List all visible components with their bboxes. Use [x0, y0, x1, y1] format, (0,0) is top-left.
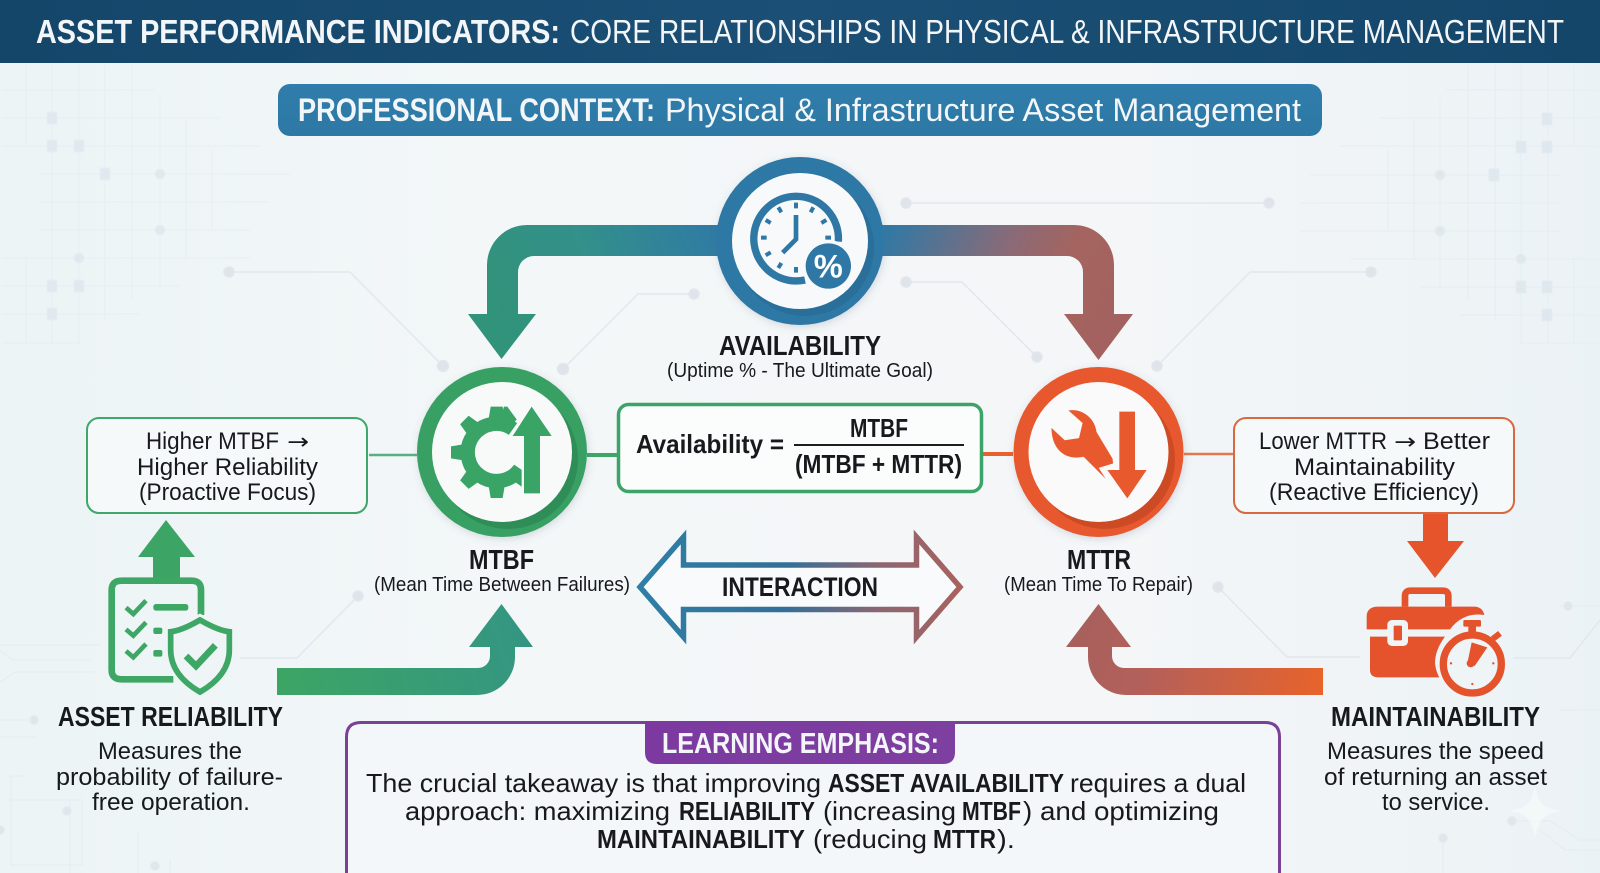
professional context pill: Physical & Infrastructure Asset Management — [665, 92, 1301, 128]
availability label — [667, 330, 933, 382]
interaction double arrow: INTERACTION — [722, 572, 878, 602]
arrow: availability to MTTR — [865, 225, 1133, 360]
decorative grid: top left — [2, 65, 290, 343]
professional context pill — [278, 84, 1322, 136]
learning emphasis tag: LEARNING EMPHASIS: — [662, 728, 939, 760]
asset reliability text: free operation. — [92, 789, 250, 816]
icon: availability clock circle — [716, 157, 884, 325]
learning emphasis body text: requires a dual — [1070, 768, 1246, 798]
availability label: (Uptime % - The Ultimate Goal) — [667, 360, 933, 382]
asset reliability text: ASSET RELIABILITY — [58, 701, 283, 732]
learning emphasis body text: ). — [997, 824, 1015, 854]
learning emphasis body text: approach: maximizing — [405, 796, 670, 826]
formula box — [618, 404, 982, 492]
MTBF label — [374, 544, 630, 596]
arrow: callout down to maintainability — [1407, 514, 1464, 578]
asset reliability text — [56, 701, 283, 816]
arrow: reliability to MTBF — [277, 604, 533, 695]
learning emphasis body text: ) and optimizing — [1023, 796, 1219, 826]
MTTR label: MTTR — [1067, 544, 1131, 575]
learning emphasis body text: RELIABILITY — [679, 796, 815, 826]
decorative grid: top right — [1300, 65, 1598, 343]
arrow: maintainability to MTTR — [1066, 604, 1323, 695]
title banner: ASSET PERFORMANCE INDICATORS: — [36, 13, 560, 50]
icon: availability clock circle: % — [814, 248, 843, 285]
callout: higher MTBF: Higher MTBF — [146, 428, 279, 455]
formula box: MTBF — [850, 413, 908, 443]
learning emphasis body text: MTBF — [962, 796, 1021, 826]
learning emphasis tag — [645, 721, 955, 764]
callout: lower MTTR — [1234, 418, 1514, 513]
callout: higher MTBF — [87, 418, 367, 513]
callout: higher MTBF: (Proactive Focus) — [139, 479, 316, 506]
learning emphasis body text: MAINTAINABILITY — [597, 824, 805, 854]
icon: MTBF gear and up arrow circle — [417, 367, 587, 537]
learning emphasis body text: MTTR — [933, 824, 996, 854]
formula box: Availability = — [636, 429, 784, 459]
callout: lower MTTR: → — [1394, 430, 1416, 455]
icon: reliability checklist and shield — [112, 581, 229, 692]
maintainability text — [1324, 701, 1547, 816]
MTTR label — [1004, 544, 1193, 596]
learning emphasis body text: (reducing — [813, 824, 927, 854]
callout: higher MTBF: Higher Reliability — [137, 454, 318, 481]
professional context pill: PROFESSIONAL CONTEXT: — [298, 92, 655, 128]
maintainability text: to service. — [1382, 789, 1490, 816]
interaction double arrow — [640, 537, 960, 637]
callout: higher MTBF: → — [287, 430, 309, 455]
formula box: (MTBF + MTTR) — [795, 449, 962, 479]
learning emphasis body text: (increasing — [823, 796, 956, 826]
maintainability text: MAINTAINABILITY — [1331, 701, 1540, 732]
asset reliability text: probability of failure- — [56, 764, 283, 791]
maintainability text: of returning an asset — [1324, 764, 1547, 791]
title banner — [0, 0, 1600, 63]
callout: lower MTTR: Lower MTTR — [1259, 428, 1387, 455]
callout: lower MTTR: Maintainability — [1294, 454, 1455, 481]
icon: maintainability briefcase and stopwatch — [1367, 591, 1507, 699]
learning emphasis body text: ASSET AVAILABILITY — [828, 768, 1064, 798]
asset reliability text: Measures the — [98, 738, 242, 765]
learning emphasis body text: The crucial takeaway is that improving — [366, 768, 821, 798]
arrow: reliability up to callout — [138, 520, 195, 580]
callout: lower MTTR: (Reactive Efficiency) — [1269, 479, 1479, 506]
MTBF label: (Mean Time Between Failures) — [374, 574, 630, 596]
MTTR label: (Mean Time To Repair) — [1004, 574, 1193, 596]
icon: MTTR wrench and down arrow circle — [1014, 367, 1184, 537]
learning emphasis body text — [366, 768, 1246, 854]
panel: learning emphasis — [346, 721, 1280, 873]
MTBF label: MTBF — [469, 544, 534, 575]
watermark sparkle — [1507, 786, 1563, 838]
arrow: availability to MTBF — [468, 225, 735, 359]
connector lines — [369, 454, 1234, 455]
decorative circuit lines — [224, 198, 1600, 658]
callout: lower MTTR: Better — [1423, 428, 1490, 455]
maintainability text: Measures the speed — [1327, 738, 1544, 765]
availability label: AVAILABILITY — [719, 330, 881, 361]
